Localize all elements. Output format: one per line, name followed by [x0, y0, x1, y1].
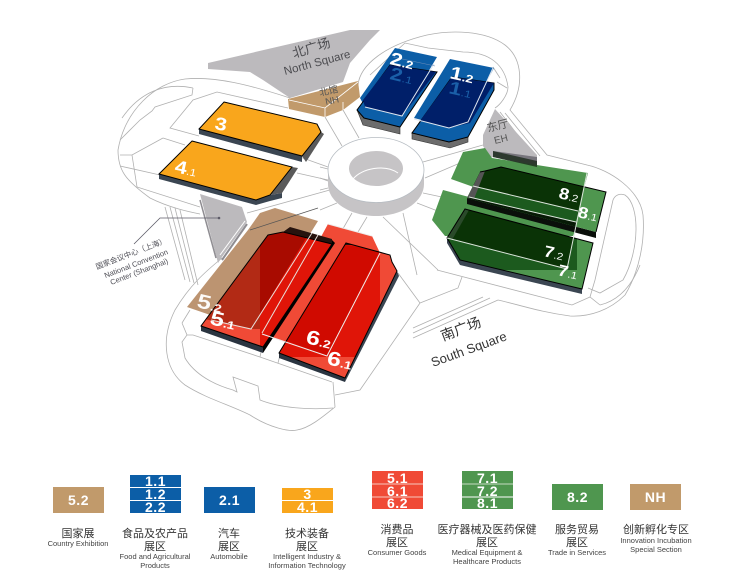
legend: intelligent industry and information technology: 技术装备	[285, 526, 329, 540]
green zone 7: 7.1	[556, 261, 580, 283]
legend: medical equipment and healthcare products: 7.1	[477, 470, 498, 486]
legend: food and agricultural products: Food and Agricultural	[120, 552, 191, 561]
label: south square: South Square	[429, 329, 509, 370]
legend: country exhibition: 5.2	[68, 492, 89, 508]
green zone 8: 8.1	[576, 203, 600, 225]
legend: intelligent industry and information technology: Intelligent Industry &	[273, 552, 341, 561]
legend: innovation incubation special section	[620, 484, 692, 554]
label: north square: 北广场	[290, 35, 332, 61]
legend: medical equipment and healthcare products: 7.2	[477, 483, 498, 499]
legend: food and agricultural products: 1.2	[145, 486, 166, 502]
hall 4.1	[159, 141, 298, 205]
legend: consumer goods: 展区	[386, 536, 408, 549]
hall 6: 6.2	[304, 326, 334, 353]
hall 6	[262, 224, 400, 385]
green zone 7	[440, 173, 600, 295]
legend: food and agricultural products: 食品及农产品	[122, 526, 188, 540]
north hall NH: 北馆	[318, 83, 339, 99]
legend: innovation incubation special section: Innovation Incubation	[620, 536, 692, 545]
hall 3: 3	[213, 114, 229, 136]
east hall EH: 东厅	[486, 117, 510, 135]
green zone 7: 7.2	[542, 242, 566, 264]
legend: innovation incubation special section: NH	[645, 489, 666, 505]
legend: automobile: 汽车	[218, 526, 240, 540]
legend: trade in services: Trade in Services	[548, 548, 606, 557]
hall 2: 2.1	[388, 64, 415, 88]
label: south square: 南广场	[438, 314, 483, 344]
legend: country exhibition: 国家展	[62, 526, 94, 540]
north hall NH	[288, 81, 360, 117]
label: national convention center	[94, 235, 170, 287]
legend: automobile: 展区	[218, 540, 240, 553]
legend: consumer goods: 消费品	[380, 522, 414, 536]
legend: consumer goods: Consumer Goods	[368, 548, 427, 557]
site outline	[118, 32, 643, 430]
legend: country exhibition: Country Exhibition	[48, 539, 108, 548]
hall 1: 1.1	[447, 78, 474, 102]
legend: medical equipment and healthcare products: Healthcare Products	[453, 557, 521, 566]
label: national convention center: National Convention	[103, 247, 169, 280]
legend: medical equipment and healthcare products	[438, 470, 536, 566]
east hall EH: EH	[493, 133, 509, 147]
legend: medical equipment and healthcare products: 医疗器械及医药保健	[438, 522, 536, 536]
green zone 8: 8.2	[557, 184, 581, 206]
label: national convention center: Center (Shanghai)	[109, 256, 170, 287]
legend: intelligent industry and information technology: 4.1	[297, 499, 318, 515]
legend: consumer goods: 5.1	[387, 470, 408, 486]
country exhibition zone 5.2	[187, 208, 318, 329]
legend: intelligent industry and information technology: 3	[303, 486, 312, 502]
legend: country exhibition	[48, 487, 108, 548]
legend: trade in services: 8.2	[567, 489, 588, 505]
legend: trade in services: 展区	[566, 536, 588, 549]
hall 2: 2.2	[388, 49, 416, 74]
north hall NH: NH	[324, 94, 340, 108]
hall 4.1: 4.1	[173, 157, 199, 181]
hall 5: 5.2	[195, 290, 225, 317]
legend: intelligent industry and information technology	[268, 486, 346, 570]
national convention center pointer	[94, 194, 247, 287]
legend: food and agricultural products: Products	[140, 561, 170, 570]
legend: medical equipment and healthcare products: Medical Equipment &	[452, 548, 522, 557]
legend: innovation incubation special section: Special Section	[630, 545, 682, 554]
central ring	[328, 138, 424, 216]
label: north square: North Square	[283, 49, 352, 78]
legend: food and agricultural products: 2.2	[145, 499, 166, 515]
hall 1	[412, 59, 494, 148]
legend: consumer goods	[368, 470, 427, 557]
legend: medical equipment and healthcare products: 展区	[476, 536, 498, 549]
legend: food and agricultural products: 展区	[144, 540, 166, 553]
legend: innovation incubation special section: 创新孵化专区	[623, 522, 689, 536]
north square	[208, 30, 380, 98]
label: north square	[283, 35, 352, 78]
hall 3	[199, 102, 324, 162]
east hall EH	[483, 109, 537, 167]
hall 5	[195, 225, 340, 355]
legend: automobile	[204, 487, 255, 561]
legend: food and agricultural products	[120, 473, 191, 570]
consumer goods zone light band	[262, 224, 397, 356]
hall 6: 6.1	[325, 347, 355, 374]
hall 2	[357, 48, 437, 134]
hall 5: 5.1	[208, 307, 238, 334]
legend: trade in services	[548, 484, 606, 557]
legend: intelligent industry and information technology: Information Technology	[268, 561, 346, 570]
legend: automobile: 2.1	[219, 492, 240, 508]
label: national convention center: 国家会议中心（上海）	[94, 235, 168, 271]
legend: intelligent industry and information technology: 展区	[296, 540, 318, 553]
legend: automobile: Automobile	[210, 552, 248, 561]
legend: medical equipment and healthcare products: 8.1	[477, 495, 498, 511]
legend: food and agricultural products: 1.1	[145, 473, 166, 489]
green zone 8	[432, 148, 610, 240]
legend: trade in services: 服务贸易	[555, 523, 599, 536]
legend: consumer goods: 6.1	[387, 483, 408, 499]
legend: consumer goods: 6.2	[387, 495, 408, 511]
hall 1: 1.2	[448, 63, 476, 88]
